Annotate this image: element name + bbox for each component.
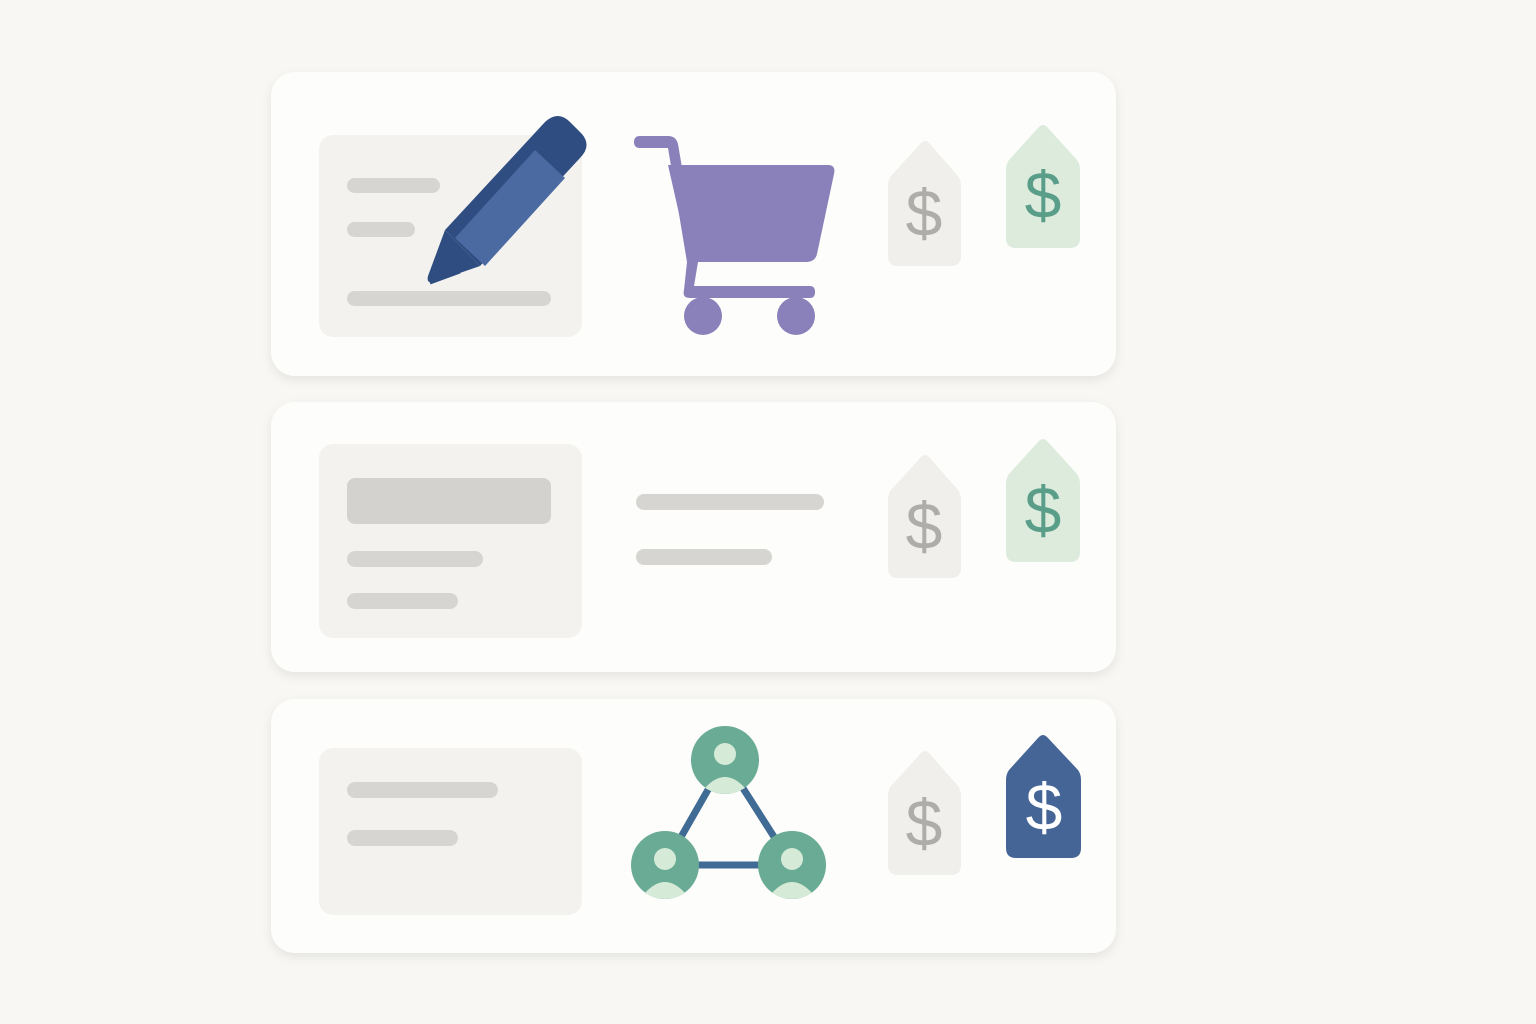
icon: grey price tag (888, 751, 961, 875)
icon: shopping cart (634, 136, 834, 335)
icon: grey price tag: $ (906, 176, 942, 250)
icon: pencil (428, 116, 587, 283)
card 3: network (271, 699, 1116, 953)
text lines (636, 494, 824, 565)
card 1: pencil and cart (271, 72, 1116, 376)
icon: grey price tag: $ (906, 489, 942, 563)
icon: blue price tag (1006, 735, 1081, 858)
icon: green price tag: $ (1025, 158, 1061, 232)
icon: green price tag (1006, 439, 1080, 562)
text placeholder box (319, 135, 582, 337)
icon: grey price tag: $ (906, 786, 942, 860)
icon: grey price tag (888, 141, 961, 266)
text placeholder box (319, 748, 582, 915)
icon: green price tag (1006, 125, 1080, 248)
icon: blue price tag: $ (1026, 770, 1062, 844)
icon: green price tag: $ (1025, 473, 1061, 547)
icon: grey price tag (888, 455, 961, 578)
card 2: text lines (271, 402, 1116, 672)
icon: people network (631, 726, 826, 899)
text placeholder box (319, 444, 582, 638)
